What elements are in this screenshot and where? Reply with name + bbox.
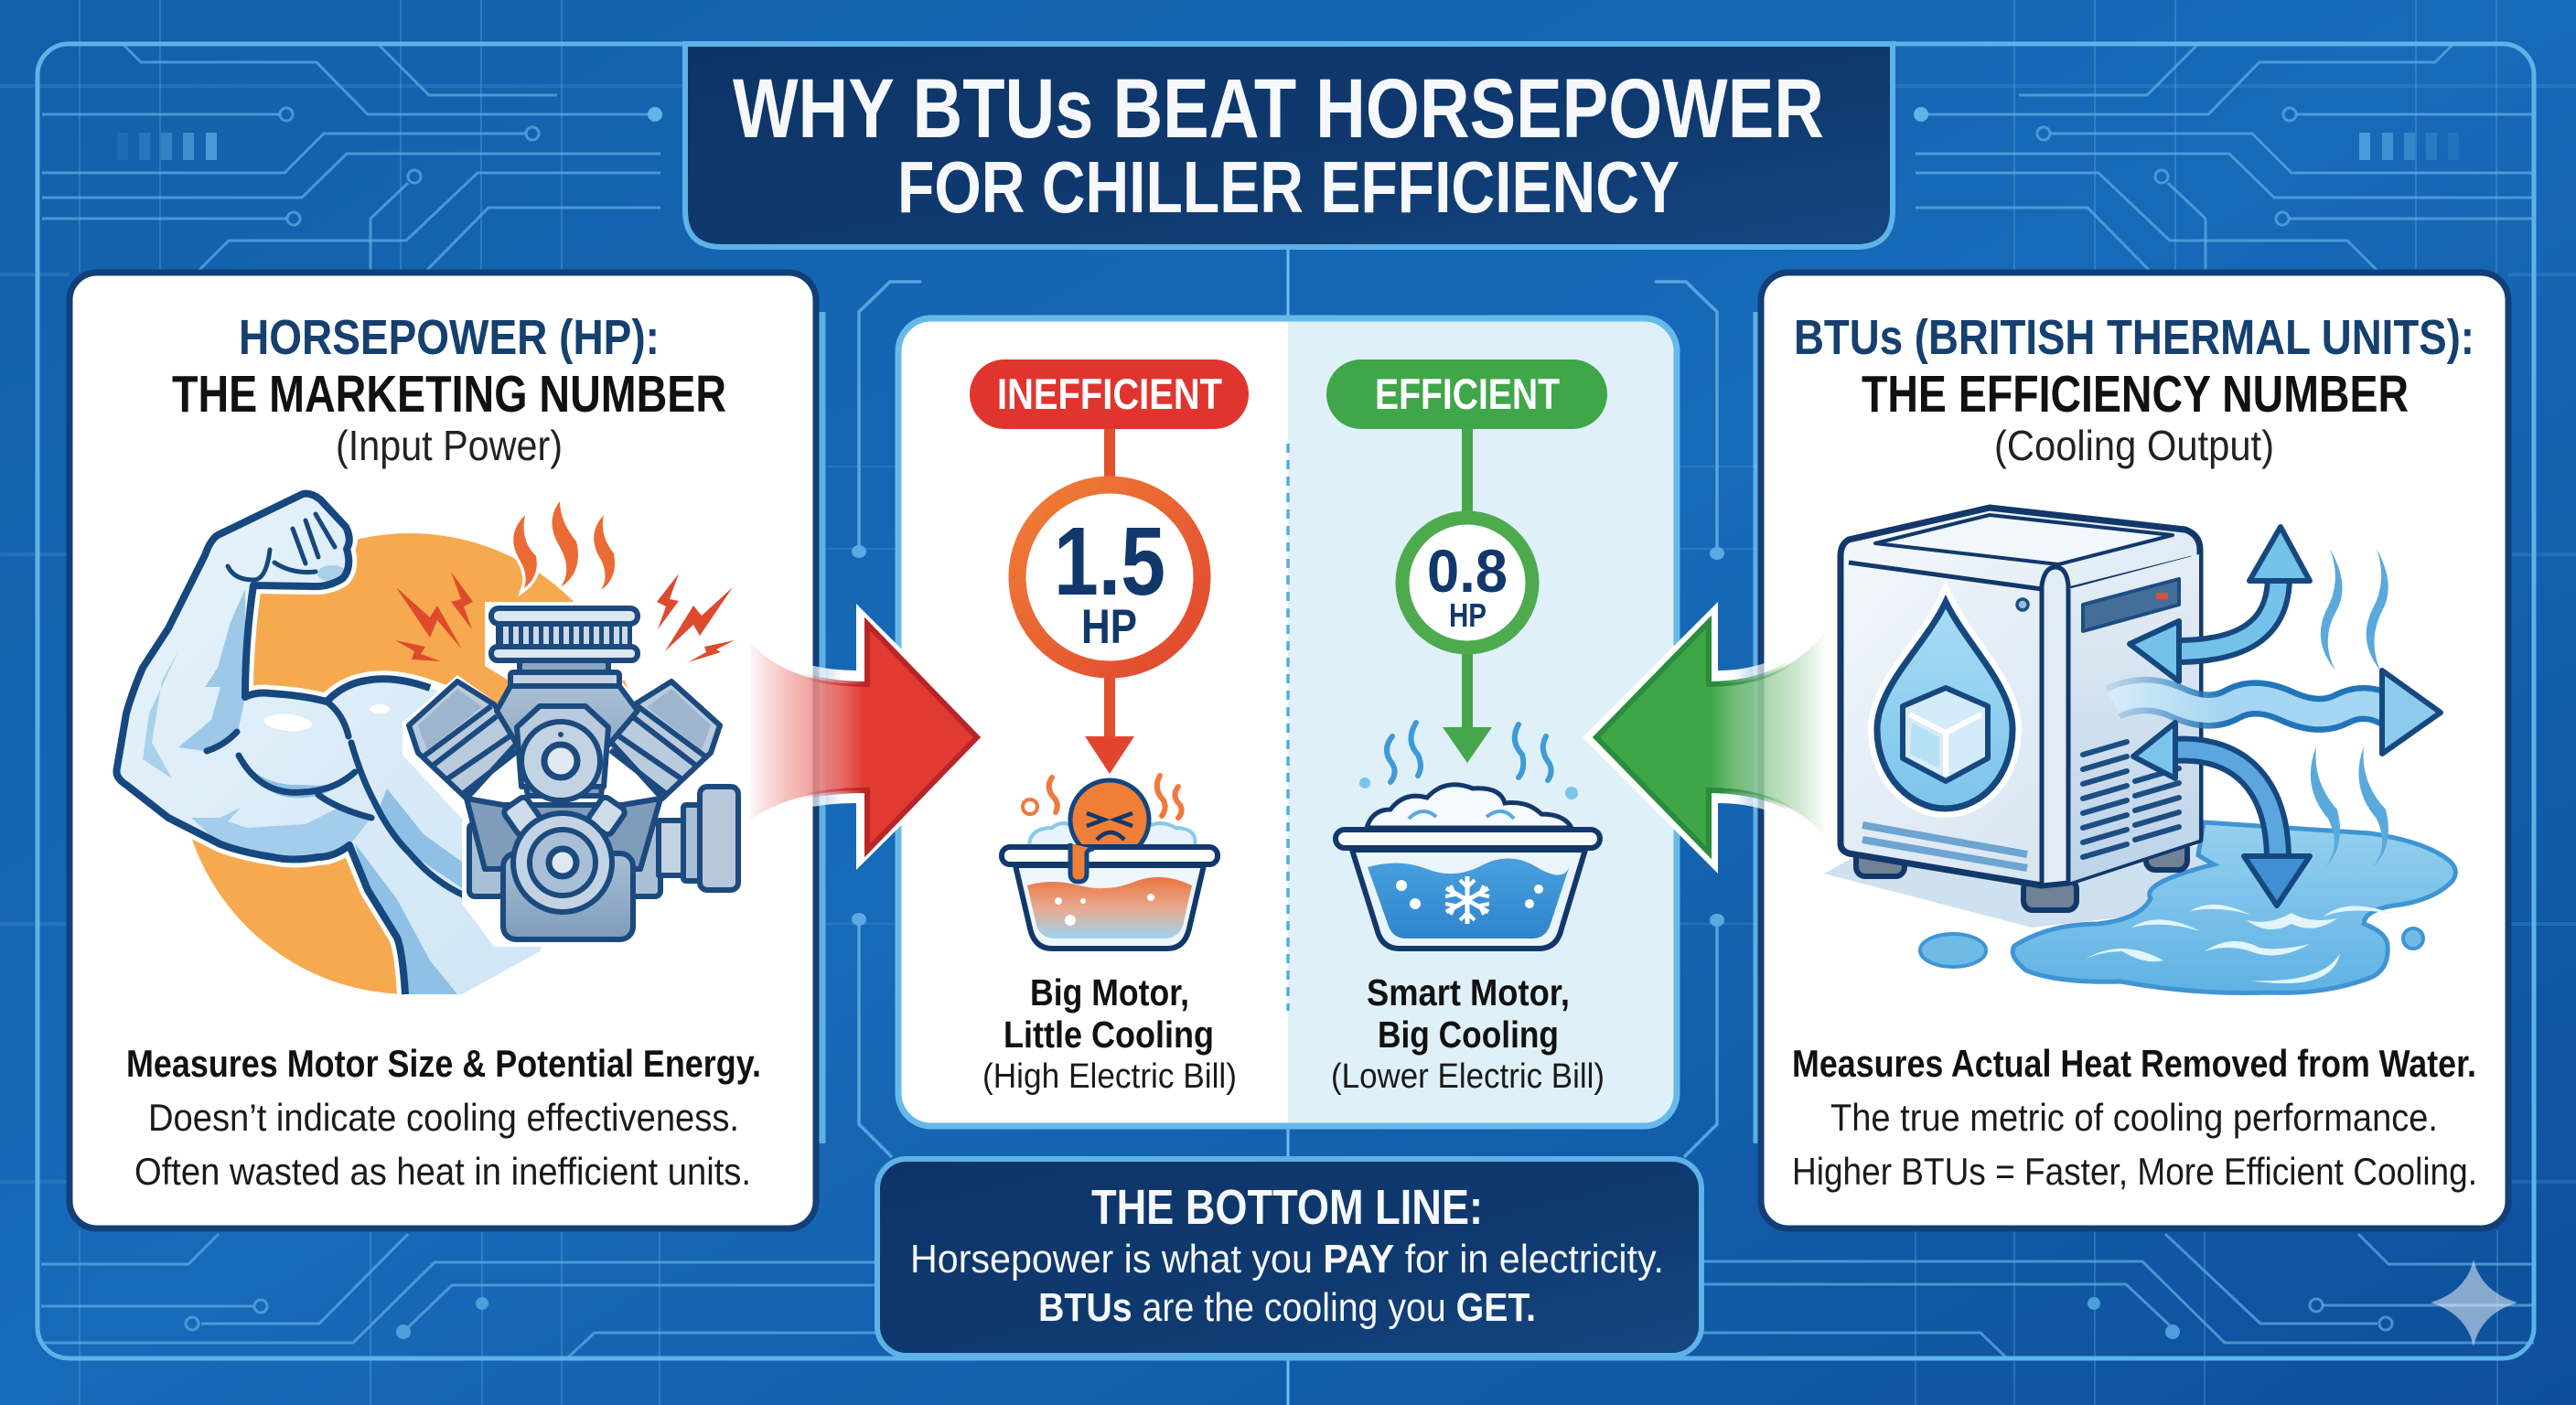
centre block [497,686,638,796]
flexed arm [116,494,558,994]
flames [513,501,615,590]
inefficient column [970,359,1249,1096]
body text: horsepower [126,1042,761,1193]
engine [402,602,746,947]
body line 1: Measures Motor Size & Potential Energy. [126,1042,761,1085]
heading: BTUs: BTUs (BRITISH THERMAL UNITS): [1794,310,2474,365]
water puddle [2012,822,2455,993]
subheading: cooling output: (Cooling Output) [1994,422,2274,469]
right cylinder [607,681,720,799]
bottom right traces [1703,1234,2534,1357]
heading: the marketing number: THE MARKETING NUMBER [172,365,726,424]
arm shading [178,589,245,751]
unit shadow [1824,846,2218,928]
efficient pill: EFFICIENT [1375,370,1560,418]
stem and arrow [1104,429,1115,741]
title banner [685,44,1893,247]
body line 2: The true metric of cooling performance. [1830,1096,2438,1139]
small puddles [1920,934,1986,967]
body line 1: Measures Actual Heat Removed from Water. [1792,1042,2476,1085]
body line 3: Higher BTUs = Faster, More Efficient Cooling. [1792,1150,2477,1193]
chiller body [1841,508,2200,885]
bottom line sentence 1: Horsepower is what you PAY for in electricity. [910,1237,1664,1282]
inefficient pill [970,359,1249,429]
signal bars [117,133,2459,160]
arrow: red pointing right [750,604,990,870]
left cylinder [409,681,521,799]
icon: hot tub with unhappy face [1002,776,1218,949]
vents [2083,742,2179,857]
body line 2: Doesn’t indicate cooling effectiveness. [148,1096,739,1139]
caption: inefficient: Big Motor, [1030,971,1189,1014]
body text: BTUs [1792,1042,2477,1193]
arrow: down into water [2133,723,2310,906]
orange sun circle [179,533,640,994]
0.8 HP gauge: HP [1449,596,1487,634]
side column traces [859,282,1717,1157]
caption: efficient: (Lower Electric Bill) [1331,1057,1605,1096]
icon: cold tub with snowflake [1336,723,1600,949]
bottom left traces [41,1234,875,1357]
inefficient pill: INEFFICIENT [997,370,1222,418]
decorative star [2431,1260,2517,1346]
panel: BTUs [1761,273,2508,1228]
1.5 HP gauge: 1.5 [1054,508,1165,616]
illustration: chiller and water [1824,508,2455,993]
title line 1: WHY BTUs BEAT HORSEPOWER [733,62,1824,156]
panel: comparison [898,318,1677,1126]
arrow: wavy outflow [2113,670,2441,754]
muscle lines [228,514,335,580]
bottom line box [877,1159,1701,1356]
1.5 HP gauge: HP [1081,600,1137,654]
chiller feet [1856,840,2187,910]
0.8 HP gauge: 0.8 [1427,537,1508,605]
1.5 HP gauge [1017,485,1202,670]
lower block [503,853,633,939]
heading: horsepower: HORSEPOWER (HP): [239,310,660,365]
efficient column [1326,359,1607,1096]
bottom line sentence 2: BTUs are the cooling you GET. [1038,1285,1536,1330]
heading: the efficiency number: THE EFFICIENCY NUMBER [1862,365,2409,424]
panel: horsepower [70,273,816,1228]
body line 3: Often wasted as heat in inefficient units. [134,1150,751,1193]
arrow: up and back [2130,527,2310,681]
0.8 HP gauge [1402,518,1532,648]
water ripples [2086,905,2397,983]
caption: efficient: Smart Motor, [1367,971,1570,1014]
arm outline [116,494,430,994]
heat waves [2311,549,2388,867]
indicator button [2017,599,2028,610]
base stripes [1862,825,2027,868]
arrow: green pointing left [1583,602,1824,874]
snowflake [1445,876,1489,924]
subheading: input power: (Input Power) [336,422,563,469]
bottom line heading: THE BOTTOM LINE: [1091,1180,1483,1235]
display panel [2083,579,2179,631]
lightning bolts [395,572,735,662]
filter [520,660,608,672]
title line 2: FOR CHILLER EFFICIENCY [897,146,1680,228]
efficient pill [1326,359,1607,429]
caption: efficient [1331,971,1605,1096]
top right traces [1914,46,2534,270]
caption: efficient: Big Cooling [1378,1014,1559,1056]
caption: inefficient [982,971,1237,1096]
illustration: muscle arm and engine [116,494,746,994]
water drop with ice cube [1877,602,2012,809]
caption: inefficient: (High Electric Bill) [982,1057,1237,1096]
caption: inefficient: Little Cooling [1004,1014,1214,1056]
stem and arrow [1462,429,1473,732]
top left traces [42,46,660,270]
